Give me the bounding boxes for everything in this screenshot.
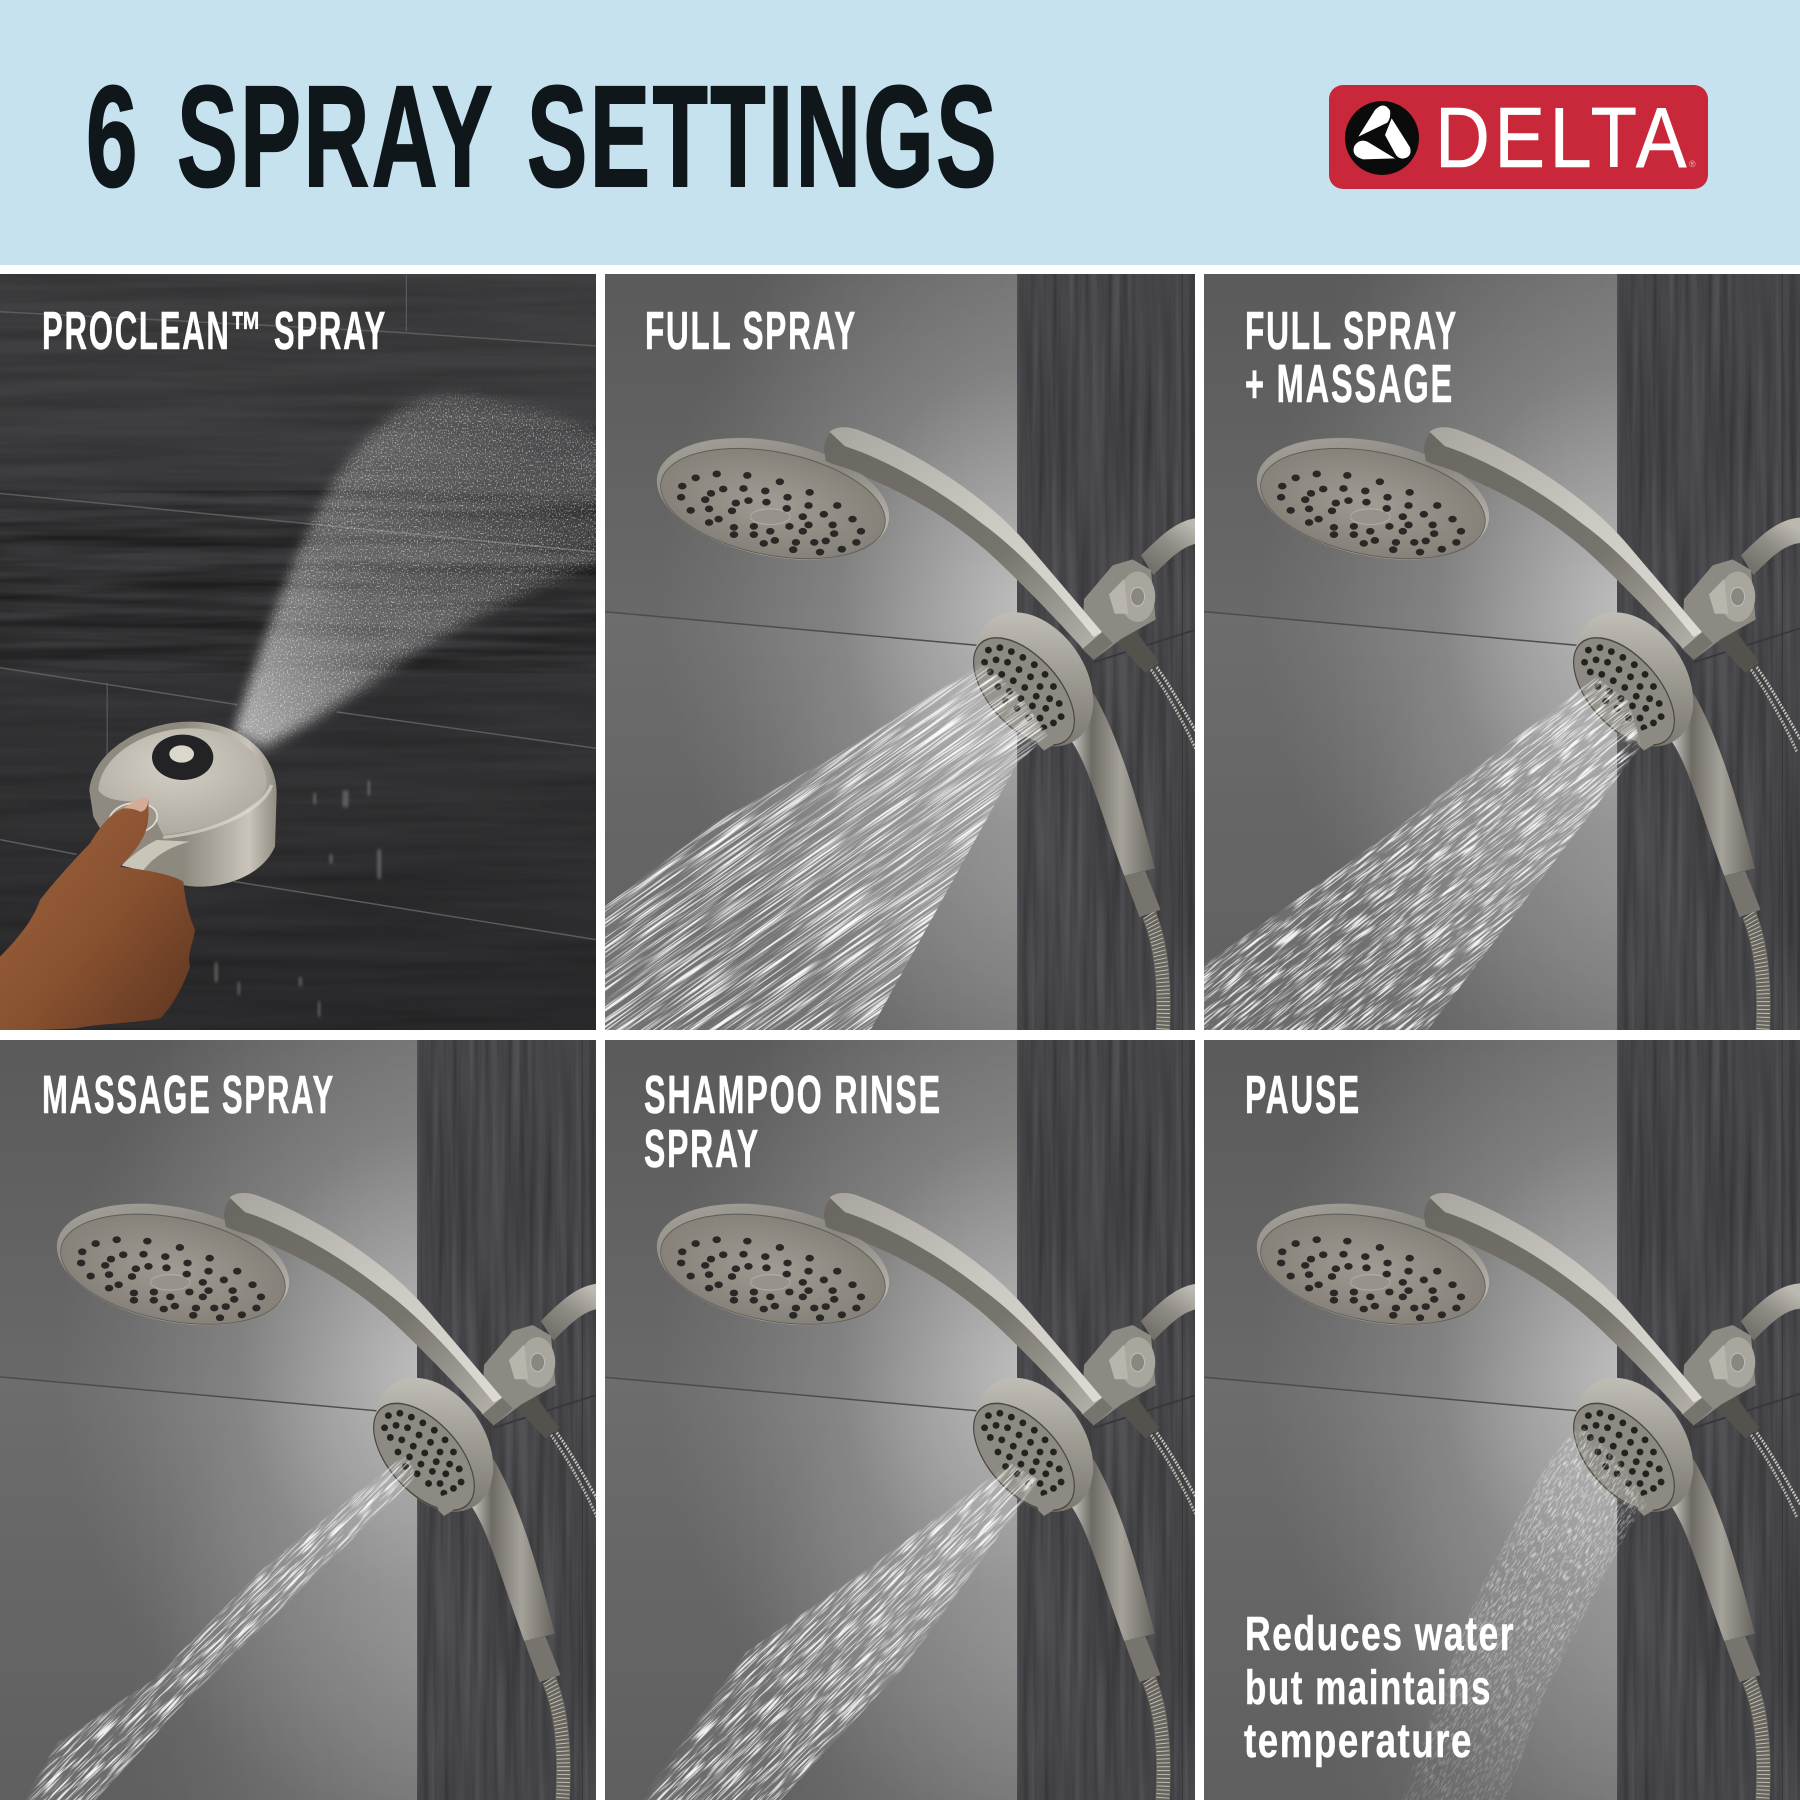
pause description: Reduces water	[1245, 1608, 1515, 1661]
device body	[89, 722, 277, 887]
panel: Massage Spray	[0, 1040, 596, 1800]
label: full spray: FULL SPRAY	[645, 301, 857, 361]
label: ProClean spray: PROCLEAN™ SPRAY	[42, 301, 387, 361]
panel: Full Spray	[605, 274, 1195, 1030]
panel: Full Spray + Massage	[1204, 274, 1800, 1030]
label: full spray plus massage: FULL SPRAY	[1245, 301, 1458, 361]
label: full spray plus massage: + MASSAGE	[1245, 354, 1454, 414]
label: massage spray: MASSAGE SPRAY	[42, 1065, 335, 1125]
Delta logo: ®	[1689, 159, 1696, 169]
title: SPRAY	[177, 56, 495, 217]
label: full spray plus massage	[1245, 301, 1458, 414]
shower fixture	[0, 1040, 601, 1800]
water droplets	[1399, 1423, 1648, 1800]
panel: Shampoo Rinse Spray	[605, 1040, 1195, 1800]
Delta logo: DELTA	[1435, 91, 1691, 186]
title: 6	[86, 56, 140, 217]
hand pressing button	[0, 798, 195, 1032]
label: shampoo rinse spray	[644, 1065, 942, 1179]
label: shampoo rinse spray: SPRAY	[644, 1119, 760, 1179]
water spray	[600, 662, 1048, 1035]
water fan from ProClean nozzles	[228, 388, 596, 756]
title	[86, 56, 999, 217]
label: pause: PAUSE	[1245, 1065, 1361, 1125]
title: SETTINGS	[527, 56, 999, 217]
label: shampoo rinse spray: SHAMPOO RINSE	[644, 1065, 942, 1125]
header band	[0, 0, 1800, 265]
shower fixture	[600, 274, 1201, 1038]
Delta logo	[1329, 85, 1708, 189]
water spray	[638, 1463, 1039, 1800]
water spray	[23, 1454, 417, 1800]
pause description: temperature	[1244, 1715, 1473, 1768]
water spray	[1200, 677, 1642, 1035]
shower fixture	[600, 1040, 1201, 1800]
panel: Pause	[1204, 1040, 1800, 1800]
shower fixture	[1200, 274, 1800, 1038]
pause description: but maintains	[1245, 1662, 1492, 1715]
panel: ProClean spray	[0, 274, 596, 1030]
pause description	[1244, 1608, 1515, 1768]
stone wall background	[0, 270, 600, 1040]
device and hand	[0, 722, 277, 1032]
shower fixture	[1200, 1040, 1800, 1800]
